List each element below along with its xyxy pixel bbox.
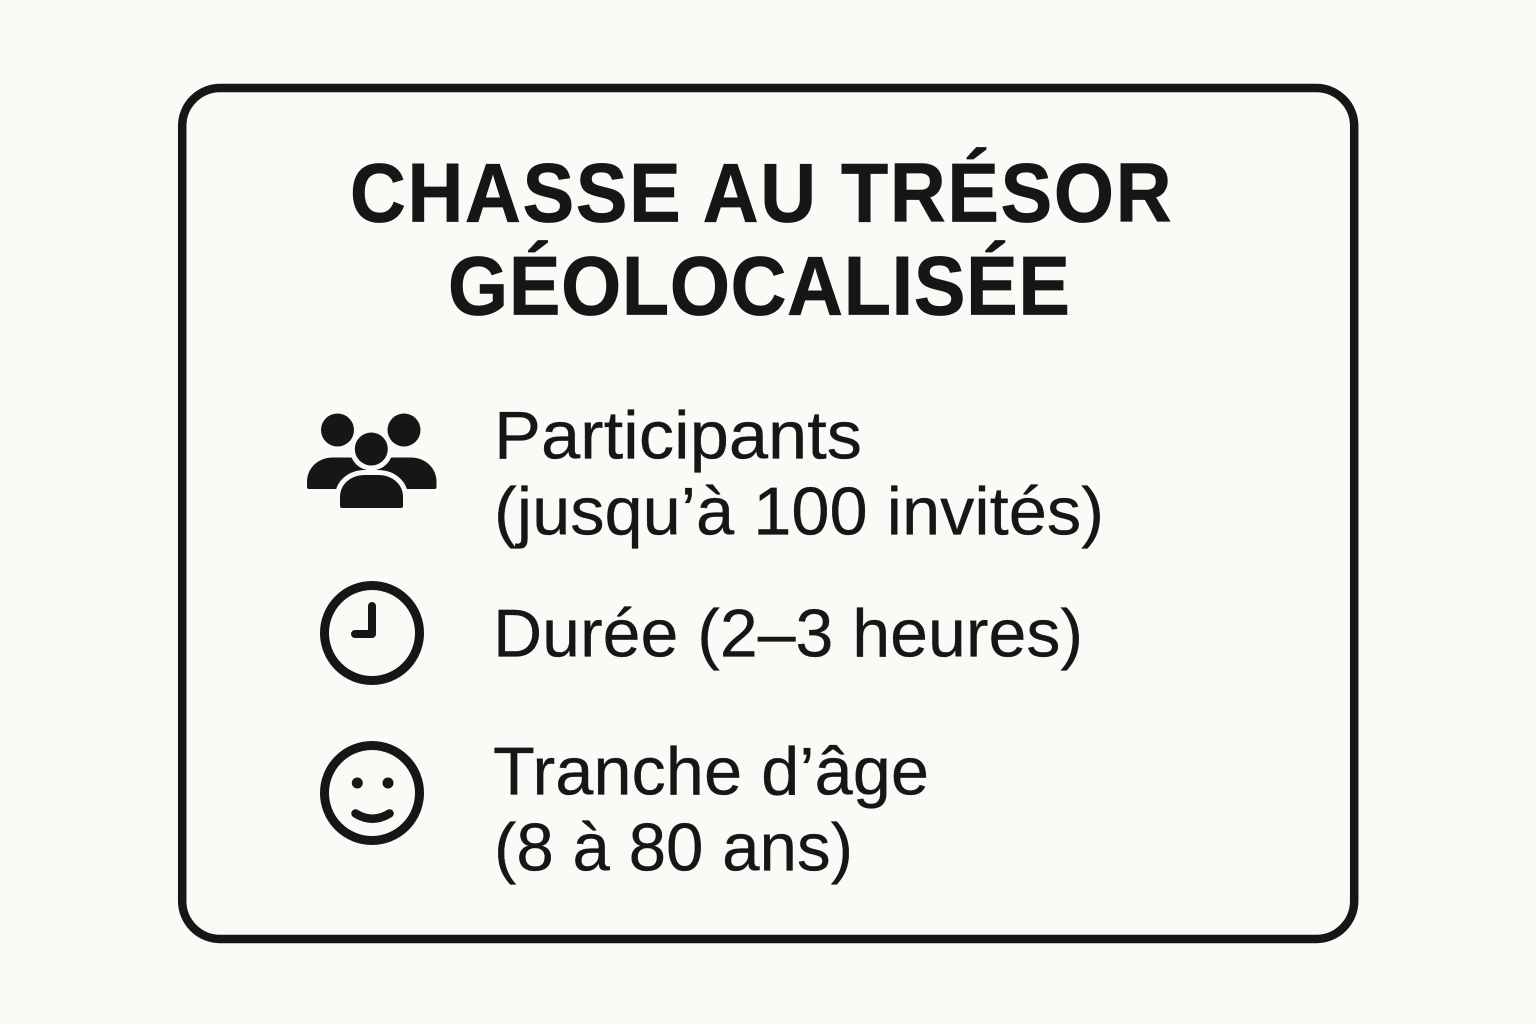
- icon: people group: [307, 414, 436, 508]
- text: participants: Participants: [494, 398, 862, 474]
- text: duration: Durée (2–3 heures): [493, 596, 1083, 672]
- title: [350, 146, 1172, 333]
- text: age range: (8 à 80 ans): [494, 810, 853, 886]
- text: age range: Tranche d’âge: [493, 734, 929, 810]
- title: GÉOLOCALISÉE: [448, 239, 1070, 333]
- text: age range: [493, 734, 929, 886]
- text: participants: [494, 398, 1104, 550]
- panel: card: [182, 88, 1354, 939]
- icon: clock: [324, 586, 420, 680]
- title: CHASSE AU TRÉSOR: [350, 146, 1172, 240]
- icon: smiley: [324, 746, 420, 840]
- text: participants: (jusqu’à 100 invités): [494, 474, 1104, 550]
